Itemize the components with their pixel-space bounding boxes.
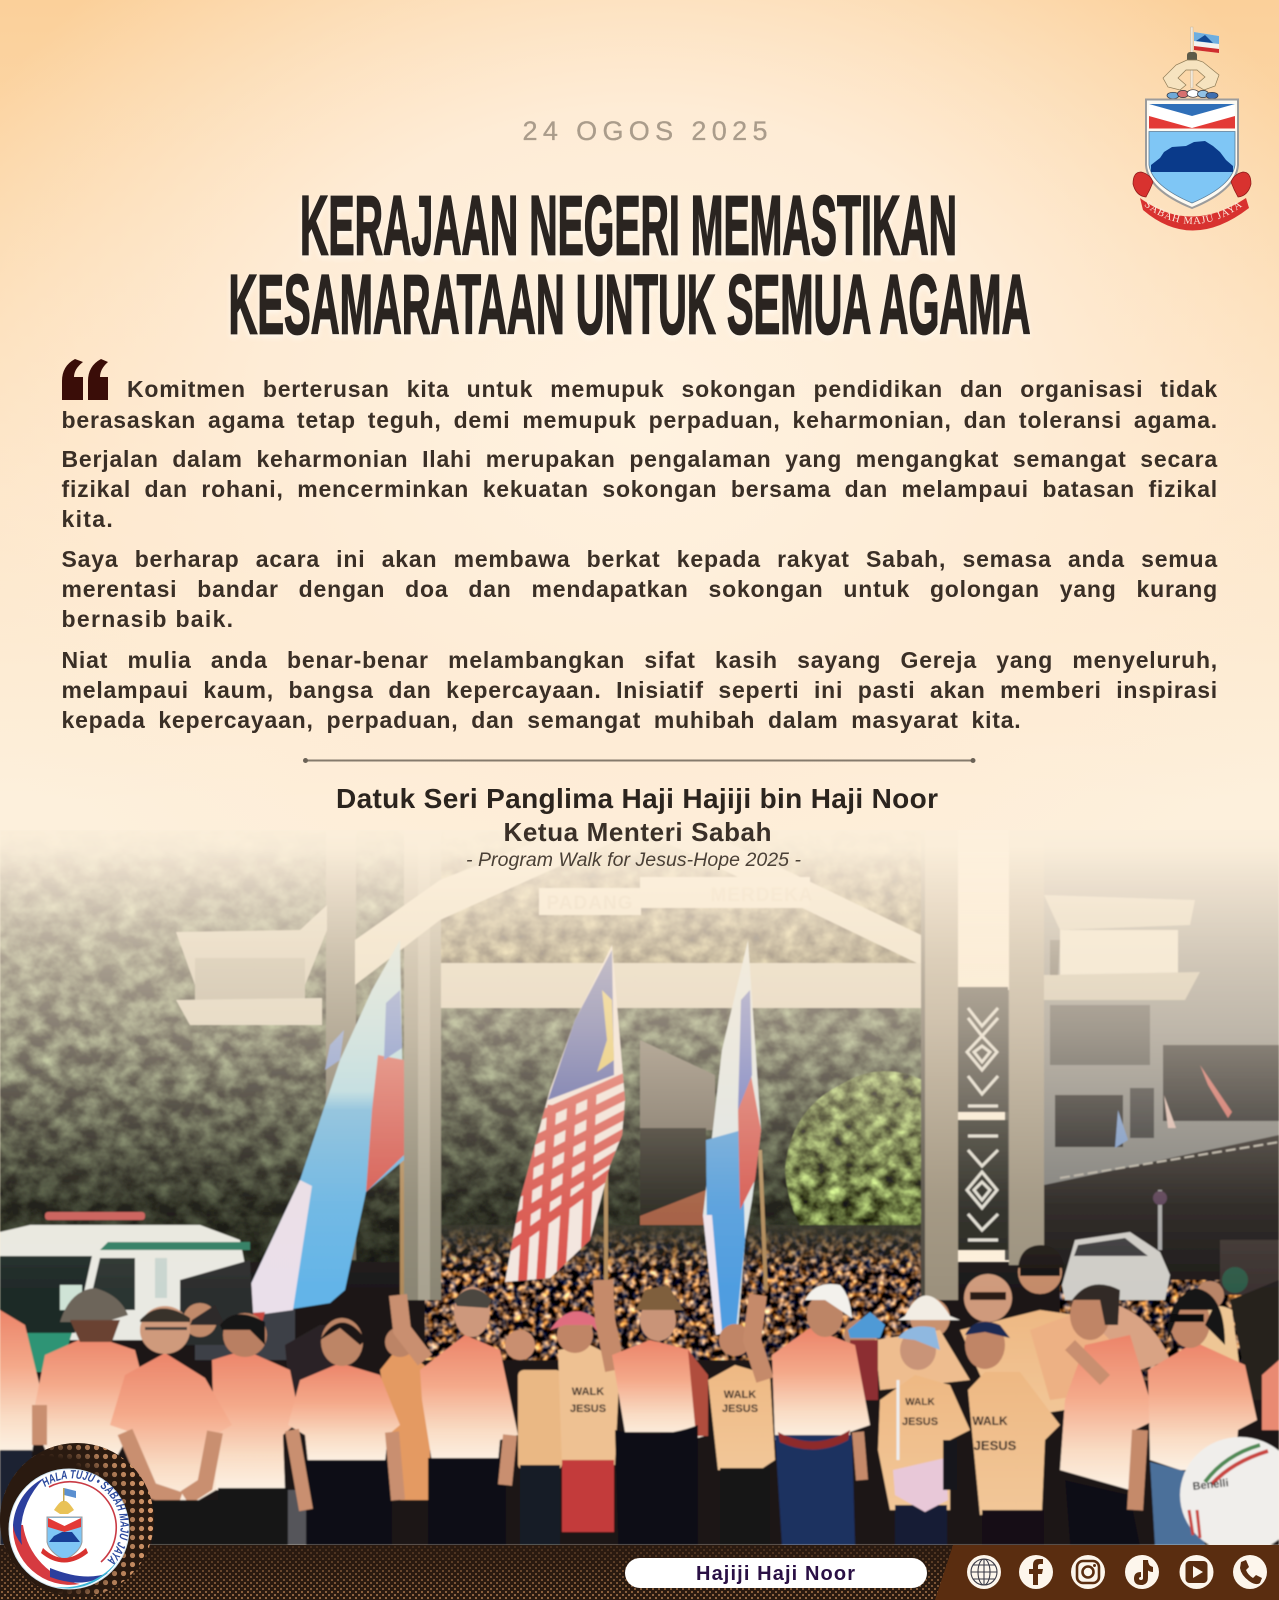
person 12: white cap [752, 1284, 870, 1545]
event caption: - Program Walk for Jesus-Hope 2025 - [466, 849, 802, 871]
crest arms [1163, 60, 1219, 90]
footer band [0, 1545, 1279, 1600]
icon: instagram [1071, 1555, 1105, 1589]
person 8 and 9: tees, red trousers [505, 1311, 620, 1545]
crest flag [1191, 27, 1219, 88]
paragraph 3: Saya berharap acara ini akan membawa berkat kepada rakyat Sabah, semasa anda semua [62, 546, 1218, 572]
paragraph 2 [62, 446, 1218, 532]
logo badge: Hala Tuju Sabah Maju Jaya [0, 1443, 154, 1596]
arch: left pillars [326, 830, 441, 1300]
paragraph 4: melampaui kaum, bangsa dan kepercayaan. Inisiatif seperti ini pasti akan memberi inspirasi [62, 677, 1218, 703]
badge text [45, 1478, 121, 1566]
person 11: WALK FOR JESUS tee: JESUS [722, 1403, 758, 1415]
title [228, 178, 1030, 352]
red arc [49, 1482, 116, 1562]
person 8 and 9: tees, red trousers: JESUS [570, 1403, 606, 1415]
crowd heads back row [898, 1245, 1279, 1400]
trees centre [444, 1007, 922, 1226]
date: 24 OGOS 2025 [522, 116, 768, 146]
person 5 [288, 1318, 400, 1545]
icon: tiktok [1125, 1555, 1159, 1589]
signatory name: Datuk Seri Panglima Haji Hajiji bin Haji Noor [336, 783, 938, 814]
paragraph 3: merentasi bandar dengan doa dan mendapatkan sokongan untuk golongan yang kurang [62, 576, 1218, 602]
person 14: navy cap [965, 1321, 1060, 1545]
person 17: long hair, sunglasses [1148, 1288, 1279, 1545]
sign: Padang Merdeka: PADANG [547, 893, 633, 914]
person 14: navy cap: WALK [972, 1414, 1008, 1428]
gate building behind centre [640, 1040, 715, 1250]
arch: right pillars [921, 830, 1044, 1300]
ambulance [0, 1212, 255, 1372]
crest beads [1167, 90, 1218, 99]
carved panels [958, 987, 1008, 1250]
person 13: blue cap with bag: WALK [905, 1397, 935, 1408]
shield field [1149, 132, 1235, 203]
paragraph 3 [62, 546, 1218, 632]
arch: left eave [176, 905, 327, 1025]
crest shield [1146, 100, 1238, 208]
paragraph 4: kepada kepercayaan, perpaduan, dan semangat muhibah dalam masyarat kita. [62, 707, 1022, 733]
paragraph 4: Niat mulia anda benar-benar melambangkan sifat kasih sayang Gereja yang menyeluruh, [62, 647, 1218, 673]
signatory role: Ketua Menteri Sabah [504, 817, 772, 847]
person 3 [212, 1313, 300, 1545]
paragraph 4 [62, 647, 1218, 733]
shield chief [1149, 104, 1235, 128]
mountain [1151, 141, 1233, 172]
trees left [0, 850, 405, 1262]
person 13: blue cap with bag: JESUS [902, 1416, 938, 1428]
helmet: Benelli [1192, 1477, 1229, 1493]
building right [1044, 830, 1279, 1290]
footer name pill: Hajiji Haji Noor [696, 1563, 855, 1585]
crest: Sabah coat of arms [1132, 26, 1252, 230]
paragraph 3: bernasib baik. [62, 606, 234, 632]
arch: right eave [1044, 895, 1200, 1000]
fade overlay [0, 815, 1279, 1295]
person 16 [1060, 1284, 1155, 1545]
crest hands [1187, 52, 1197, 70]
scroll: SABAH MAJU JAYA [1144, 201, 1242, 224]
quote mark [62, 359, 108, 400]
person 7: arm raised [398, 1287, 518, 1545]
crowd background [425, 1225, 925, 1360]
person 2: glasses [110, 1305, 230, 1502]
paragraph 2: Berjalan dalam keharmonian Ilahi merupakan pengalaman yang mengangkat semangat secara [62, 446, 1218, 472]
icon: phone [1233, 1555, 1267, 1589]
swoosh [13, 1478, 118, 1588]
helmet [1180, 1437, 1279, 1553]
arch: main beam [441, 963, 921, 1008]
person 11: WALK FOR JESUS tee [707, 1323, 776, 1472]
divider [303, 758, 976, 763]
flag: Malaysia [505, 945, 632, 1290]
tree shadow gradient [0, 1070, 836, 1264]
social icons [967, 1555, 1267, 1589]
flag: Sabah, left [234, 940, 404, 1323]
footer name pill [625, 1558, 927, 1588]
footer brown panel [935, 1545, 1279, 1600]
flagpoles [398, 1149, 770, 1296]
person 13: blue cap with bag [878, 1326, 970, 1545]
icon: facebook [1019, 1555, 1053, 1589]
paragraph 2: fizikal dan rohani, mencerminkan kekuatan sokongan bersama dan melampaui batasan fizikal [62, 476, 1218, 502]
road patches [195, 1300, 308, 1545]
person 0 [0, 1310, 42, 1545]
paragraph 2: kita. [62, 506, 114, 532]
dark base behind people [0, 1262, 1279, 1545]
dotted sphere [0, 1420, 160, 1600]
white disc [9, 1469, 129, 1589]
icon: website globe [967, 1555, 1001, 1589]
small crest [41, 1488, 88, 1562]
flag: Sabah, right [703, 940, 761, 1335]
paragraph 1: Komitmen berterusan kita untuk memupuk sokongan pendidikan dan organisasi tidak [127, 376, 1218, 402]
crowd top soft edge [425, 1225, 925, 1270]
icon: video play [1180, 1555, 1214, 1589]
arch: roof slopes [354, 854, 922, 985]
trees behind upper gate [440, 851, 922, 964]
paragraph 1 [62, 376, 1218, 433]
person 1: hat [32, 1288, 148, 1460]
person 14: navy cap: JESUS [974, 1438, 1017, 1453]
logo badge: Hala Tuju Sabah Maju Jaya: HALA TUJU • SABAH MAJU JAYA [42, 1470, 129, 1564]
sign: Padang Merdeka [539, 877, 814, 915]
person 11: WALK FOR JESUS tee: WALK [724, 1389, 756, 1401]
person 8 and 9: tees, red trousers: WALK [572, 1386, 604, 1398]
person 10: hat, arm raised [603, 1280, 708, 1545]
back row tees [183, 1300, 1170, 1500]
bright green tree [784, 1070, 922, 1226]
car white [1062, 1232, 1170, 1300]
scroll [1132, 172, 1252, 230]
photo: walkers at Padang Merdeka gate [0, 800, 1279, 1553]
paragraph 1: berasaskan agama tetap teguh, demi memupuk perpaduan, keharmonian, dan toleransi agama. [62, 407, 1218, 433]
sign: Padang Merdeka: MERDEKA [710, 885, 814, 906]
